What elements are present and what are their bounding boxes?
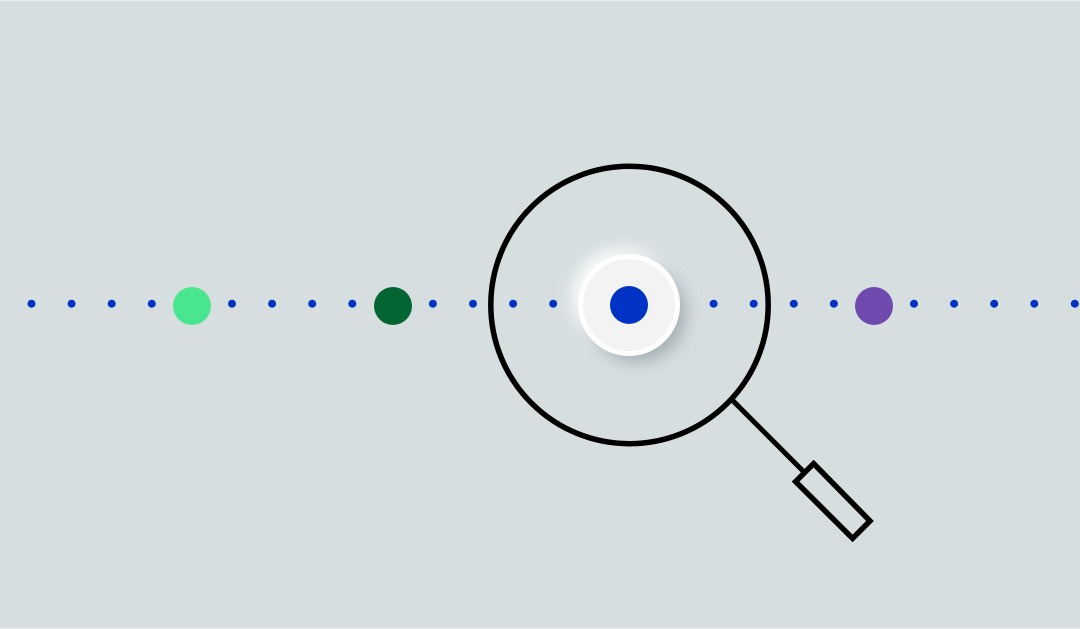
lens ring — [491, 166, 768, 444]
handle shaft — [732, 400, 804, 472]
dotted line: small blue dots — [28, 300, 1079, 308]
handle grip — [796, 464, 870, 538]
icon: magnifying glass — [491, 166, 870, 538]
purple dot — [855, 287, 893, 325]
light green dot — [173, 287, 211, 325]
dark green dot — [374, 287, 412, 325]
highlighted centre button — [573, 249, 686, 362]
